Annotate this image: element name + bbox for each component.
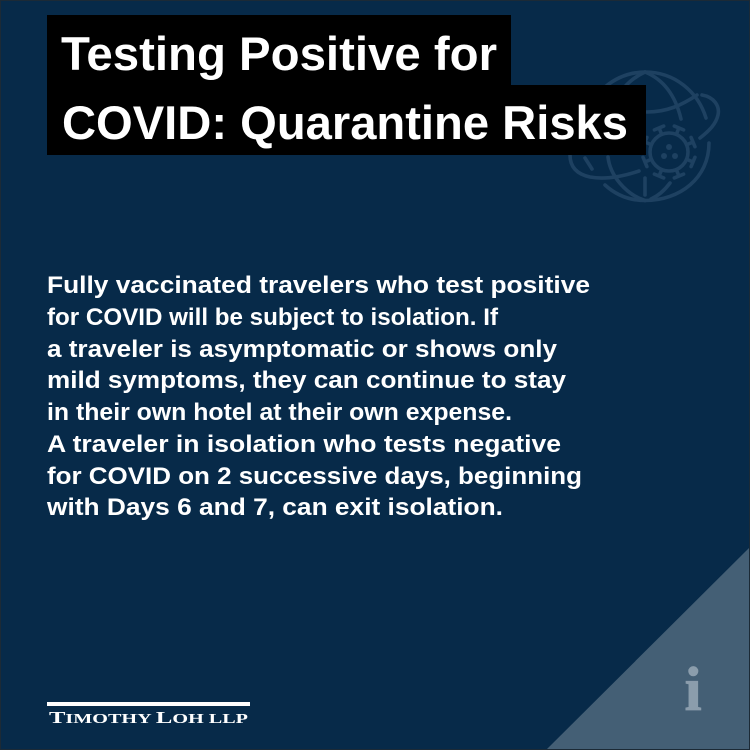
- body text: [46, 272, 590, 521]
- body text: mild symptoms, they can continue to stay: [47, 367, 566, 394]
- logo: [47, 702, 250, 727]
- body text: for COVID on 2 successive days, beginning: [47, 463, 582, 490]
- body text: in their own hotel at their own expense.: [47, 399, 512, 426]
- title line 1: Testing Positive for: [61, 27, 497, 80]
- title: [47, 15, 646, 155]
- title background: line 2: [47, 85, 646, 155]
- body text: Fully vaccinated travelers who test positive: [47, 272, 590, 299]
- body text: a traveler is asymptomatic or shows only: [47, 336, 557, 363]
- icon: virus: [643, 126, 695, 178]
- logo wordmark: T IMOTHY L OH LLP: [49, 708, 248, 727]
- title background: line 1: [47, 15, 511, 85]
- title line 2: COVID: Quarantine Risks: [62, 96, 628, 149]
- logo rule: [47, 702, 250, 706]
- icon: info: i: [684, 656, 702, 724]
- body text: A traveler in isolation who tests negative: [47, 431, 561, 458]
- triangle: [547, 548, 749, 749]
- body text: for COVID will be subject to isolation. If: [47, 304, 499, 331]
- icon: globe with virus: [570, 72, 718, 200]
- corner triangle with info icon: [547, 548, 749, 749]
- body text: with Days 6 and 7, can exit isolation.: [46, 494, 503, 521]
